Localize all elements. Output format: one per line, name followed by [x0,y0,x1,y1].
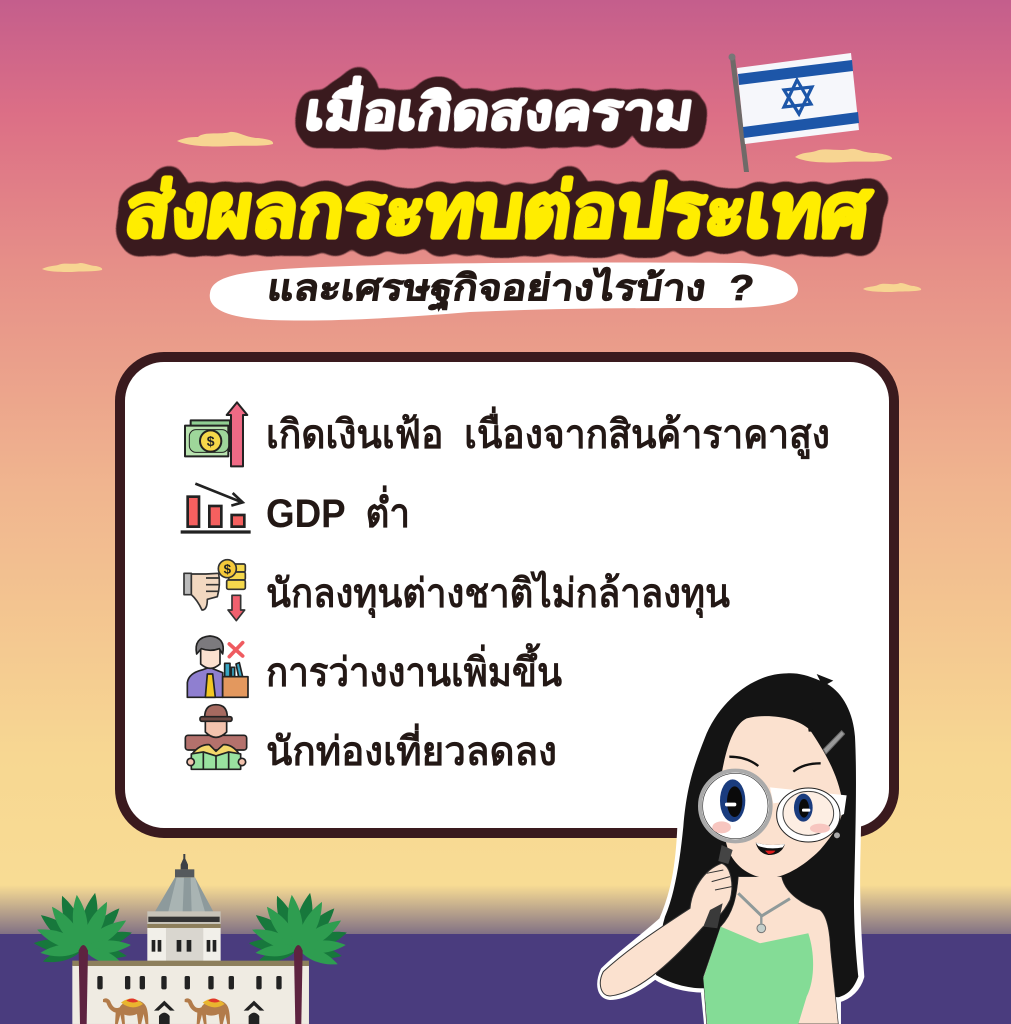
text: low GDP: GDP ต่ำ [266,485,410,536]
earring [834,832,840,838]
mouth [756,843,785,855]
text: inflation: เกิดเงินเฟ้อ เนื่องจากสินค้าราคาสูง [266,406,830,459]
text: tourists decline: นักท่องเที่ยวลดลง [266,723,557,774]
icon: camel right [185,998,230,1024]
fringe parting [808,702,823,732]
title: second line: ส่งผลกระทบต่อประเทศ [120,169,877,252]
text: unemployment: การว่างงานเพิ่มขึ้น [266,643,562,695]
eyebrows [729,757,821,772]
building body [72,854,309,1024]
white sticker outline [600,673,862,1024]
illustration: girl with magnifying glass [600,673,862,1024]
icon: Israeli flag [728,53,859,172]
hair clip [823,731,845,754]
icon: banknote with rising arrow: $ [207,433,215,449]
icon: banknote with rising arrow [185,402,247,466]
subtitle banner [210,263,798,321]
icon: unemployed worker with box [187,636,248,697]
neck and shoulders [703,877,838,1024]
icon: tourist with map [185,705,247,769]
icon: falling bar chart [181,484,251,532]
panel: effects list [120,357,894,833]
magnifier handle [718,845,733,864]
cloud: right of title [795,149,892,162]
hair [656,673,858,997]
green dress [703,927,813,1024]
text: foreign investors: นักลงทุนต่างชาติไม่กล้าลงทุน [266,570,730,619]
icon: left palm [33,891,134,969]
subtitle banner: และเศรษฐกิจอย่างไรบ้าง ? [264,266,757,311]
fingers [707,870,732,890]
illustration: building with palm trees and camels [33,854,349,1024]
arm and hand [600,863,732,996]
icon: right palm [248,891,349,969]
icon: thumbs down, coins, down arrow [184,560,245,621]
face [720,716,843,878]
title: first line: เมื่อเกิดสงคราม [301,76,698,140]
cloud: far left [42,263,102,272]
necklace [738,893,790,916]
glasses [770,787,847,842]
palm trunks in front of building [79,945,303,1024]
icon: camel left [103,998,148,1024]
cloud: far right [863,283,921,292]
cloud: left of title [177,132,273,146]
magnifying lens [700,771,771,841]
icon: thumbs down, coins, down arrow: $ [224,562,232,577]
